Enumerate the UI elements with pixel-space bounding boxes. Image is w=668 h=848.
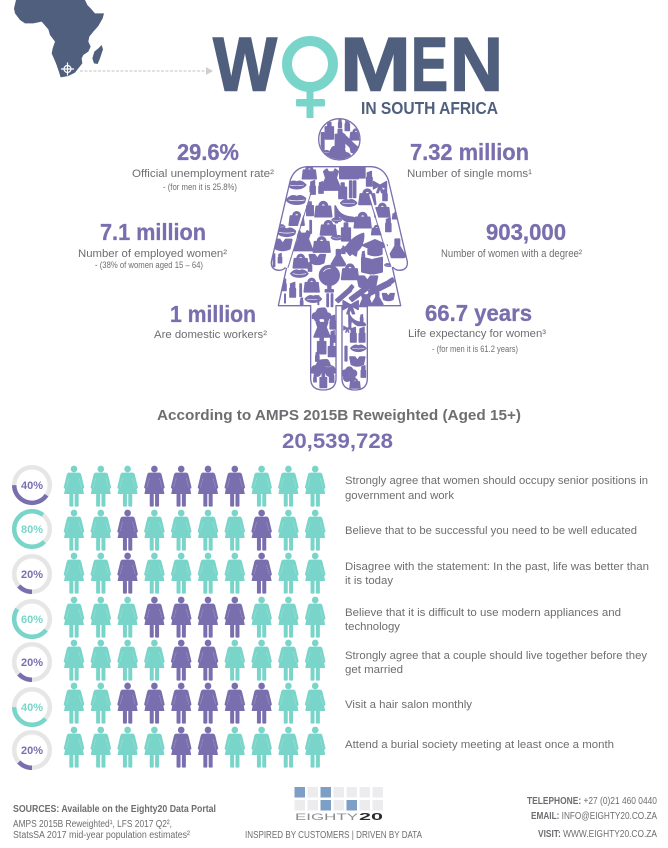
people pictogram row 7: [64, 727, 326, 768]
row 7: burial society: [14, 727, 614, 768]
people pictogram row 6: [64, 683, 326, 724]
stat: employed women: [78, 219, 227, 270]
people pictogram row 5: [64, 640, 326, 681]
row 1: senior positions: Strongly agree that women should occupy senior positions in: [345, 475, 648, 487]
donut 80%: 80%: [21, 524, 43, 536]
stat: employed women: - (38% of women aged 15 – 64): [95, 260, 203, 270]
row 5: live together: Strongly agree that a couple should live together before they: [345, 650, 648, 662]
logo: Eighty20: 20: [359, 812, 384, 823]
donut 20%: 20%: [21, 569, 43, 581]
subtitle: IN SOUTH AFRICA: [361, 98, 498, 118]
stat: employed women: Number of employed women²: [78, 248, 227, 260]
map of Africa with South Africa marker: [14, 0, 104, 77]
donut 20%: [14, 644, 50, 680]
logo squares: [294, 787, 383, 810]
people pictogram row 3: [64, 553, 326, 594]
donut 60%: 60%: [21, 614, 43, 626]
row 3: life was better: Disagree with the statement: In the past, life was better than: [345, 561, 649, 573]
figure head: [319, 119, 362, 164]
row 1: senior positions: government and work: [345, 490, 455, 502]
row 5: live together: [14, 640, 648, 681]
stat: unemployment rate: 29.6%: [177, 139, 239, 165]
stat: life expectancy: 66.7 years: [425, 300, 532, 326]
stat: single moms: [407, 139, 532, 180]
donut 40%: [7, 460, 57, 510]
row 4: modern appliances: Believe that it is difficult to use modern appliances and: [345, 607, 621, 619]
total population number: 20,539,728: [282, 430, 393, 453]
section heading: According to AMPS 2015B Reweighted (Aged 15+): [157, 407, 521, 424]
row 2: well educated: [7, 504, 637, 554]
donut 60%: [7, 594, 57, 644]
stat: life expectancy: Life expectancy for women³: [408, 328, 546, 340]
row 4: modern appliances: [7, 594, 621, 644]
footer: sources: StatsSA 2017 mid-year population estimates²: [13, 830, 191, 841]
contact details: [527, 796, 657, 840]
donut 20%: 20%: [21, 745, 43, 757]
people pictogram row 1: [64, 466, 326, 507]
donut 20%: [14, 732, 50, 768]
woman figure filled with icons: [270, 119, 410, 392]
contact details: TELEPHONE: +27 (0)21 460 0440: [527, 796, 657, 807]
dotted arrow from map to title: [80, 67, 213, 75]
donut 80%: [7, 504, 57, 554]
stat: women with a degree: [441, 219, 582, 260]
row 3: life was better: it is today: [345, 575, 394, 587]
title: WOMEN: N: [450, 22, 503, 108]
title: WOMEN: W: [213, 22, 277, 108]
row 3: life was better: [14, 553, 649, 594]
row 7: burial society: Attend a burial society meeting at least once a month: [345, 739, 614, 751]
donut 40%: 40%: [21, 702, 43, 714]
stat: women with a degree: Number of women with a degree²: [441, 248, 582, 260]
footer: sources: SOURCES: Available on the Eighty20 Data Portal: [13, 804, 216, 815]
tagline: INSPIRED BY CUSTOMERS | DRIVEN BY DATA: [245, 830, 422, 841]
stat: domestic workers: Are domestic workers²: [154, 329, 267, 341]
stat: women with a degree: 903,000: [486, 219, 566, 245]
donut 40%: [7, 682, 57, 732]
title: WOMEN: M: [340, 22, 411, 108]
donut 20%: 20%: [21, 657, 43, 669]
stat: employed women: 7.1 million: [100, 219, 206, 245]
donut 20%: [14, 556, 50, 592]
stat: domestic workers: [154, 301, 267, 341]
stat: unemployment rate: - (for men it is 25.8%): [163, 182, 237, 192]
row 6: hair salon: [7, 682, 473, 732]
footer: sources: [13, 804, 216, 841]
title: WOMEN: [213, 22, 503, 118]
logo: Eighty20: [294, 787, 384, 823]
row 6: hair salon: Visit a hair salon monthly: [345, 699, 473, 711]
stat: domestic workers: 1 million: [170, 301, 256, 327]
row 1: senior positions: [7, 460, 648, 510]
people pictogram row 4: [64, 597, 326, 638]
footer: sources: AMPS 2015B Reweighted¹, LFS 2017 Q2²,: [13, 819, 172, 830]
stat: life expectancy: [408, 300, 546, 354]
stat: single moms: 7.32 million: [410, 139, 529, 165]
stat: unemployment rate: [132, 139, 274, 192]
stat: unemployment rate: Official unemployment rate²: [132, 168, 274, 180]
stat: life expectancy: - (for men it is 61.2 years): [432, 344, 518, 354]
row 2: well educated: Believe that to be successful you need to be well educated: [345, 525, 637, 537]
row 5: live together: get married: [345, 664, 403, 676]
row 4: modern appliances: technology: [345, 621, 401, 633]
stat: single moms: Number of single moms¹: [407, 168, 532, 180]
donut 40%: 40%: [21, 480, 43, 492]
title: WOMEN: E: [411, 22, 448, 108]
people pictogram row 2: [64, 510, 326, 551]
logo: Eighty20: EIGHTY: [295, 812, 359, 823]
figure body: [270, 165, 410, 392]
